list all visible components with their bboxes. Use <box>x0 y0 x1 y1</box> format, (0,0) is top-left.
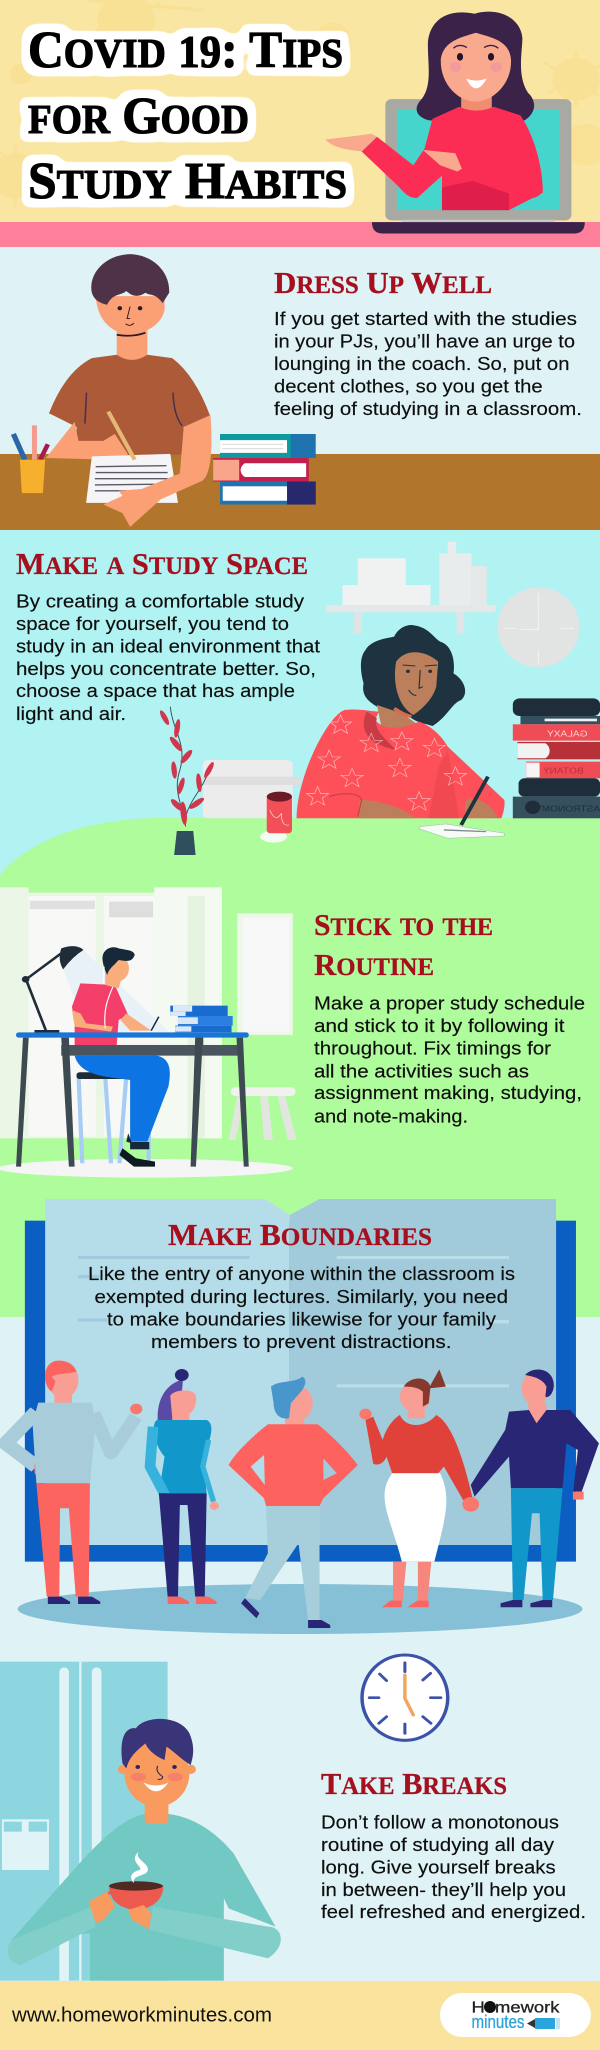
title <box>28 14 347 211</box>
text block: light and air. <box>16 703 126 724</box>
text block: and note-making. <box>314 1106 468 1126</box>
text block: long. Give yourself breaks <box>321 1856 556 1878</box>
panel: dress up well <box>13 254 582 527</box>
heading <box>314 904 493 983</box>
person 2 <box>150 1369 219 1604</box>
illustration: teacher on laptop <box>325 12 585 234</box>
text block: decent clothes, so you get the <box>274 376 543 396</box>
heading: Dress Up Well <box>274 262 492 301</box>
text block: If you get started with the studies <box>274 308 577 329</box>
text block: Like the entry of anyone within the classroom is <box>88 1263 515 1284</box>
illustration: woman writing at desk: GALAXY <box>547 730 587 738</box>
text block: assignment making, studying, <box>314 1082 582 1103</box>
text block <box>314 992 585 1126</box>
text block: to make boundaries likewise for your family <box>107 1308 497 1330</box>
text block <box>16 590 320 724</box>
text block: space for yourself, you tend to <box>16 613 289 634</box>
title: for Good <box>28 80 249 146</box>
virus background pattern <box>0 0 600 207</box>
illustration: boy studying at desk <box>13 254 316 527</box>
website url: www.homeworkminutes.com <box>11 2004 272 2026</box>
text block: in between- they’ll help you <box>321 1879 566 1900</box>
panel: make a study space <box>16 542 600 855</box>
person 5 <box>462 1369 599 1607</box>
text block: lounging in the coach. So, put on <box>274 353 570 374</box>
person 3 <box>228 1377 358 1628</box>
illustration: man with coffee by fridge <box>0 1662 281 1981</box>
icon: wall clock <box>362 1655 448 1740</box>
footer <box>11 1993 591 2037</box>
heading: Make a Study Space <box>16 543 308 582</box>
title: Covid 19: Tips <box>28 14 343 80</box>
text block: in your PJs, you’ll have an urge to <box>274 330 575 352</box>
person 1 <box>6 1361 142 1604</box>
illustration: student at desk with lamp <box>0 887 297 1178</box>
person 4 <box>359 1369 473 1607</box>
text block: exempted during lectures. Similarly, you need <box>94 1286 508 1307</box>
logo: homework minutes: Homework <box>472 2000 561 2016</box>
text block: throughout. Fix timings for <box>314 1038 551 1058</box>
panel: take breaks <box>0 1655 586 1981</box>
text block: all the activities such as <box>314 1060 529 1082</box>
text block: study in an ideal environment that <box>16 636 320 656</box>
text block: Make a proper study schedule <box>314 992 585 1014</box>
illustration: open book backdrop <box>18 1199 582 1634</box>
text block: feeling of studying in a classroom. <box>274 398 582 419</box>
illustration: woman writing at desk: ASTRONOMY <box>535 805 600 813</box>
panel: stick to the routine <box>0 887 585 1178</box>
logo: homework minutes <box>440 1993 591 2037</box>
panel: make boundaries <box>6 1199 599 1634</box>
title: Study Habits <box>28 145 347 211</box>
text block <box>88 1263 515 1352</box>
heading: Take Breaks <box>321 1763 507 1802</box>
text block: helps you concentrate better. So, <box>16 658 316 679</box>
illustration: woman writing at desk <box>158 542 600 855</box>
text block <box>321 1812 586 1922</box>
illustration: woman writing at desk: BOTANY <box>543 766 584 775</box>
heading: Stick to the <box>314 904 493 943</box>
panel: header <box>0 0 600 234</box>
illustration: group of five people <box>6 1361 599 1628</box>
text block: feel refreshed and energized. <box>321 1901 586 1922</box>
logo: homework minutes: minutes <box>472 2012 524 2032</box>
text block: choose a space that has ample <box>16 680 295 701</box>
text block: Don’t follow a monotonous <box>321 1812 559 1832</box>
heading: Routine <box>314 944 434 983</box>
heading: Make Boundaries <box>168 1214 432 1253</box>
text block: routine of studying all day <box>321 1834 555 1855</box>
text block: and stick to it by following it <box>314 1015 564 1036</box>
text block <box>274 308 582 419</box>
text block: members to prevent distractions. <box>151 1331 452 1352</box>
text block: By creating a comfortable study <box>16 590 305 612</box>
